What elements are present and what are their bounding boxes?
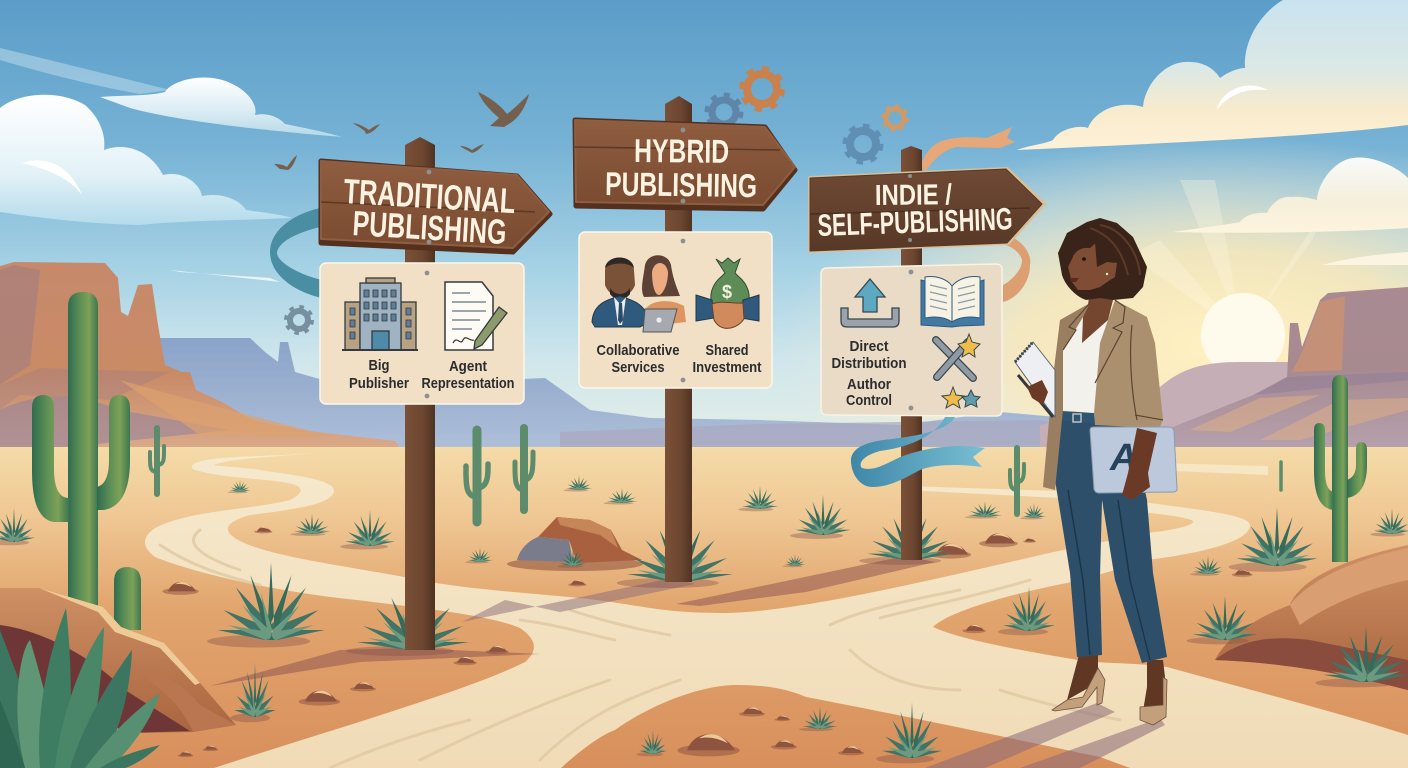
icon: open book bbox=[921, 276, 984, 327]
sand tracks on road bbox=[160, 530, 1120, 768]
label: agent representation: Representation bbox=[422, 375, 514, 392]
label: shared investment bbox=[692, 342, 762, 376]
arrow board: PUBLISHING bbox=[352, 204, 508, 252]
icon: wrench screwdriver and stars bbox=[936, 334, 980, 408]
notepad bbox=[1015, 342, 1055, 417]
icon: money bag and handshake bbox=[696, 258, 759, 328]
red mesa right bbox=[1173, 287, 1408, 448]
label: collaborative services: Services bbox=[612, 359, 664, 376]
icon: money bag and handshake: $ bbox=[722, 282, 732, 302]
neck and chest bbox=[1082, 278, 1113, 343]
label: author control bbox=[846, 376, 892, 409]
low pink hill behind sun bbox=[1040, 362, 1290, 448]
agave plants mid ground bbox=[0, 475, 1408, 763]
forearm and hand holding laptop bbox=[1122, 428, 1157, 500]
arrow board bbox=[575, 120, 795, 209]
white top bbox=[1063, 317, 1108, 413]
face bbox=[1068, 242, 1117, 290]
post bbox=[901, 146, 922, 560]
label: big publisher bbox=[349, 357, 409, 392]
sign title: HYBRID bbox=[634, 132, 729, 170]
info panel bbox=[320, 263, 524, 404]
signpost: traditional publishing bbox=[320, 137, 550, 650]
sun bbox=[1201, 293, 1285, 377]
label: author control: Author bbox=[847, 376, 891, 393]
trousers bbox=[1055, 415, 1167, 663]
label: shared investment: Investment bbox=[692, 359, 762, 376]
shoes bbox=[1052, 668, 1105, 711]
birds bbox=[274, 92, 529, 170]
cactus: right bbox=[1314, 375, 1367, 562]
info panel bbox=[579, 232, 772, 388]
sign title: INDIE / bbox=[875, 179, 952, 212]
clouds: upper left bbox=[0, 48, 342, 282]
blazer right panel bbox=[1094, 300, 1163, 433]
arrow board: SELF-PUBLISHING bbox=[817, 201, 1013, 243]
desert ground bbox=[0, 447, 1408, 768]
small distant cacti bbox=[150, 428, 1281, 522]
distant blue mesas bbox=[155, 338, 1408, 450]
post bbox=[405, 137, 435, 650]
post and figure shadows on ground bbox=[210, 556, 1165, 768]
large rock left bbox=[0, 588, 236, 733]
icon: upload arrow tray bbox=[841, 279, 899, 327]
ribbon: teal behind traditional sign bbox=[270, 208, 322, 298]
icon: big publisher building bbox=[342, 278, 418, 350]
label: agent representation: Agent bbox=[449, 358, 487, 375]
icon: collaborators with laptop bbox=[592, 255, 686, 332]
label: collaborative services: Collaborative bbox=[596, 342, 680, 359]
winding roads bbox=[145, 453, 1408, 768]
post bbox=[665, 96, 692, 582]
hand holding notepad bbox=[1027, 380, 1048, 405]
sign title: TRADITIONAL bbox=[343, 172, 517, 221]
arrow board bbox=[321, 161, 550, 252]
blazer left panel bbox=[1043, 303, 1090, 490]
hair bbox=[1058, 218, 1147, 300]
foreground agave bbox=[0, 608, 160, 768]
label: direct distribution: Distribution bbox=[832, 355, 906, 372]
label: author control: Control bbox=[846, 392, 892, 409]
arrow board bbox=[810, 169, 1044, 251]
label: direct distribution: Direct bbox=[850, 338, 888, 355]
label: big publisher: Big bbox=[368, 357, 390, 374]
cactus: small near rock bbox=[114, 567, 141, 630]
signpost: indie self-publishing bbox=[810, 146, 1044, 560]
small rocks bbox=[162, 527, 1253, 757]
arrow board: PUBLISHING bbox=[605, 165, 757, 204]
ribbon: orange around indie sign bbox=[921, 127, 1030, 302]
icon: agent contract bbox=[445, 282, 507, 350]
label: agent representation bbox=[422, 358, 514, 392]
label: collaborative services bbox=[596, 342, 680, 376]
laptop bbox=[1090, 427, 1177, 493]
info panel bbox=[821, 264, 1002, 416]
signpost: hybrid publishing bbox=[575, 96, 795, 582]
clouds: upper right bbox=[1017, 0, 1408, 265]
label: direct distribution bbox=[832, 338, 906, 372]
ribbon: teal below indie sign bbox=[851, 417, 985, 487]
central rock bbox=[507, 517, 643, 571]
label: big publisher: Publisher bbox=[349, 375, 409, 392]
red mesa left bbox=[0, 262, 400, 448]
woman author figure bbox=[1015, 218, 1177, 725]
ankles bbox=[1067, 655, 1165, 711]
rocks right bbox=[1215, 545, 1408, 690]
cactus: large left bbox=[32, 292, 130, 610]
gears bbox=[286, 69, 907, 333]
laptop: A bbox=[1109, 437, 1137, 479]
sky background bbox=[0, 0, 1408, 555]
label: shared investment: Shared bbox=[706, 342, 748, 359]
